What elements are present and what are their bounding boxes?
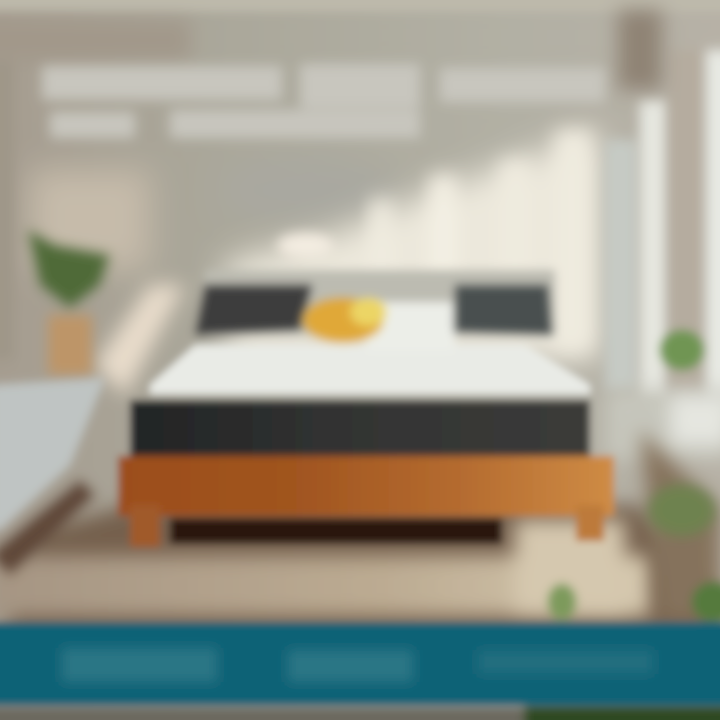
mattress base xyxy=(130,400,590,456)
yellow cushion xyxy=(303,298,386,342)
title text block (illegible in reference) xyxy=(42,64,605,138)
mattress top xyxy=(150,345,590,394)
footer text block 2 (illegible in reference) xyxy=(288,650,413,682)
teal footer banner xyxy=(0,622,720,706)
bed xyxy=(118,270,614,547)
white pillow xyxy=(365,302,455,350)
right dark pillow xyxy=(455,285,552,335)
left sunlit wall diagonal xyxy=(95,285,185,395)
bed frame xyxy=(118,456,614,547)
footer text block 3 (illegible in reference) xyxy=(478,650,653,674)
bottom plant foliage xyxy=(525,706,720,720)
bottom strip xyxy=(0,708,720,720)
left dark pillow xyxy=(195,285,312,335)
right plants xyxy=(548,330,720,622)
left potted plant xyxy=(28,230,110,375)
footer text block 1 (illegible in reference) xyxy=(62,648,217,682)
window light and curtains xyxy=(225,10,720,460)
wooden floor and rug xyxy=(0,430,720,640)
headboard xyxy=(205,270,555,335)
left armchair xyxy=(0,378,105,530)
